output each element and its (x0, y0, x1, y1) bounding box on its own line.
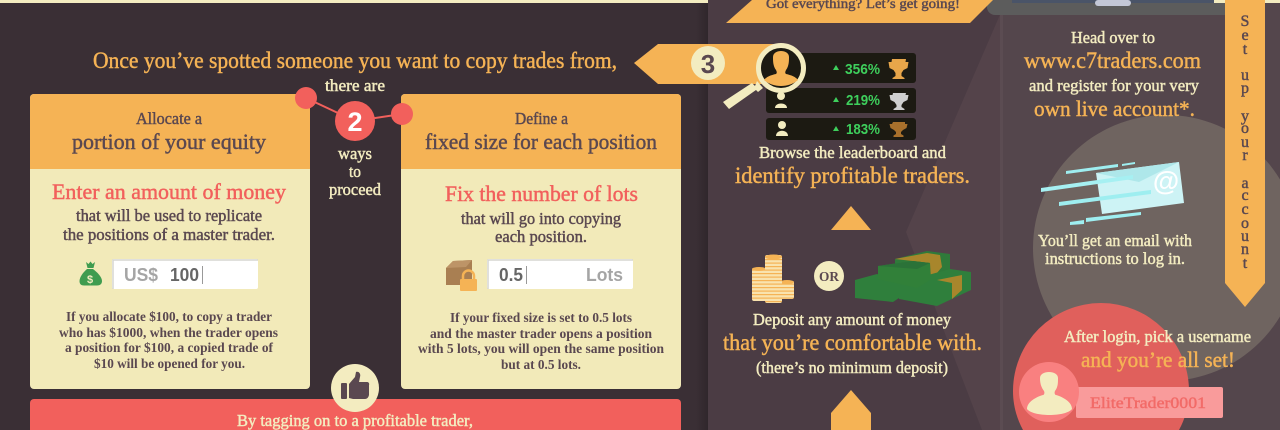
icon: locked box (446, 260, 477, 291)
panel heading: portion of your equity (72, 129, 266, 154)
text: browse leaderboard: Browse the leaderboard and (759, 143, 947, 162)
ribbon: set up your account: y (1241, 108, 1249, 125)
ribbon: set up your account: t (1243, 255, 1248, 272)
description: each position. (495, 227, 587, 246)
example text (418, 310, 664, 372)
example text (59, 309, 278, 371)
description (445, 181, 638, 246)
panel heading (425, 109, 657, 154)
red circle (1013, 303, 1189, 430)
ribbon: set up your account: u (1241, 228, 1249, 245)
text: head over: and register for your very (1029, 76, 1200, 95)
input: amount (112, 259, 258, 289)
example text: and the master trader opens a position (430, 326, 652, 341)
step 3 arrow: 3 (701, 49, 715, 79)
text: deposit: that you’re comfortable with. (723, 330, 982, 355)
ribbon: set up your account: u (1241, 67, 1249, 84)
ribbon: set up your account: c (1241, 201, 1249, 218)
row 1: 356% (845, 61, 880, 78)
username field (1076, 387, 1223, 418)
text: head over: own live account*. (1034, 96, 1195, 121)
example text: If you allocate $100, to copy a trader (66, 309, 272, 324)
panel heading: fixed size for each position (425, 129, 657, 154)
row 2: 219% (846, 92, 880, 109)
panel: allocate equity (30, 94, 310, 389)
row 3: 183% (846, 121, 880, 138)
row 2 (766, 88, 916, 113)
icon: money bag (80, 262, 102, 286)
leaderboard (766, 53, 916, 140)
ribbon: set up your account (1225, 0, 1265, 307)
panel heading: Define a (515, 109, 569, 128)
text: after login: After login, pick a username (1064, 327, 1251, 346)
text: deposit: Deposit any amount of money (753, 310, 952, 329)
description: Fix the number of lots (445, 181, 638, 206)
connector: 2 ways to proceed: 2 (347, 107, 363, 137)
description: the positions of a master trader. (63, 225, 275, 244)
ribbon: set up your account: S (1241, 13, 1249, 30)
background: left column (0, 0, 709, 430)
example text: If your fixed size is set to 0.5 lots (450, 310, 632, 325)
description (52, 179, 286, 244)
icon: flying email (1041, 162, 1184, 225)
background: middle column (708, 0, 1280, 430)
decorative grey circle (1033, 115, 1280, 381)
panel heading (72, 109, 266, 154)
icon: thumbs up (331, 364, 379, 412)
step 3 arrow (634, 44, 775, 84)
connector: 2 ways to proceed: proceed (329, 180, 382, 199)
description: that will be used to replicate (76, 206, 262, 225)
OR badge: OR (819, 269, 839, 284)
ribbon: set up your account: u (1241, 134, 1249, 151)
row 3 (766, 118, 916, 140)
text: head over: www.c7traders.com (1024, 48, 1201, 73)
panel heading: Allocate a (136, 109, 203, 128)
device edge at top (987, 0, 1280, 15)
icon: user avatar (1019, 362, 1079, 422)
text: head over (1024, 28, 1201, 121)
row 1 (766, 53, 916, 83)
username field: EliteTrader0001 (1090, 395, 1206, 412)
ribbon: set up your account: a (1241, 175, 1249, 192)
ribbon: set up your account: c (1241, 187, 1249, 204)
connector: 2 ways to proceed: there are (325, 76, 385, 95)
example text: $10 will be opened for you. (94, 356, 245, 371)
connector: 2 ways to proceed: ways (338, 144, 372, 163)
text: after login: and you’re all set! (1081, 347, 1235, 372)
description: Enter an amount of money (52, 179, 286, 204)
text: email instructions: instructions to log in. (1045, 249, 1185, 268)
top banner: get going (726, 0, 993, 23)
icon: magnifier (723, 46, 804, 109)
panel: benefit band: By tagging on to a profitable trader, (237, 411, 473, 430)
connector: 2 ways to proceed (295, 76, 413, 199)
ribbon: set up your account: n (1241, 241, 1249, 258)
text: deposit: (there’s no minimum deposit) (756, 358, 948, 377)
input: amount: 100 (170, 265, 199, 285)
input: lots (487, 259, 633, 289)
example text: with 5 lots, you will open the same position (418, 341, 664, 356)
icon: coin stacks (752, 254, 794, 303)
connector: 2 ways to proceed: to (349, 162, 361, 181)
arrow: up house (831, 390, 871, 430)
ribbon: set up your account: o (1241, 120, 1249, 137)
ribbon: set up your account: r (1242, 147, 1248, 164)
heading: once you've spotted: Once you’ve spotted someone you want to copy trades from, (93, 48, 617, 73)
text: after login (1064, 327, 1251, 372)
ribbon: set up your account: e (1241, 27, 1249, 44)
panel: fixed size (401, 94, 681, 389)
text: browse leaderboard: identify profitable traders. (735, 163, 970, 188)
input: amount: US$ (124, 265, 158, 285)
text: email instructions: You’ll get an email with (1038, 231, 1193, 250)
icon: money bag: $ (87, 274, 93, 286)
description: that will go into copying (461, 209, 621, 228)
input: lots: Lots (586, 265, 623, 285)
icon: flying email: @ (1153, 166, 1179, 196)
example text: but at 0.5 lots. (501, 357, 581, 372)
text: deposit (723, 310, 982, 377)
panel: benefit band (30, 399, 681, 430)
ribbon: set up your account: o (1241, 215, 1249, 232)
ribbon: set up your account: t (1243, 41, 1248, 58)
icon: stacks of banknotes (855, 251, 971, 306)
ribbon: set up your account: p (1241, 80, 1249, 97)
arrow: up triangle (831, 206, 871, 230)
OR badge (814, 261, 844, 291)
text: head over: Head over to (1071, 28, 1155, 47)
example text: who has $1000, when the trader opens (59, 325, 278, 340)
text: browse leaderboard (735, 143, 970, 188)
input: lots: 0.5 (499, 265, 523, 285)
example text: a position for $100, a copied trade of (65, 340, 273, 355)
text: email instructions (1038, 231, 1193, 268)
